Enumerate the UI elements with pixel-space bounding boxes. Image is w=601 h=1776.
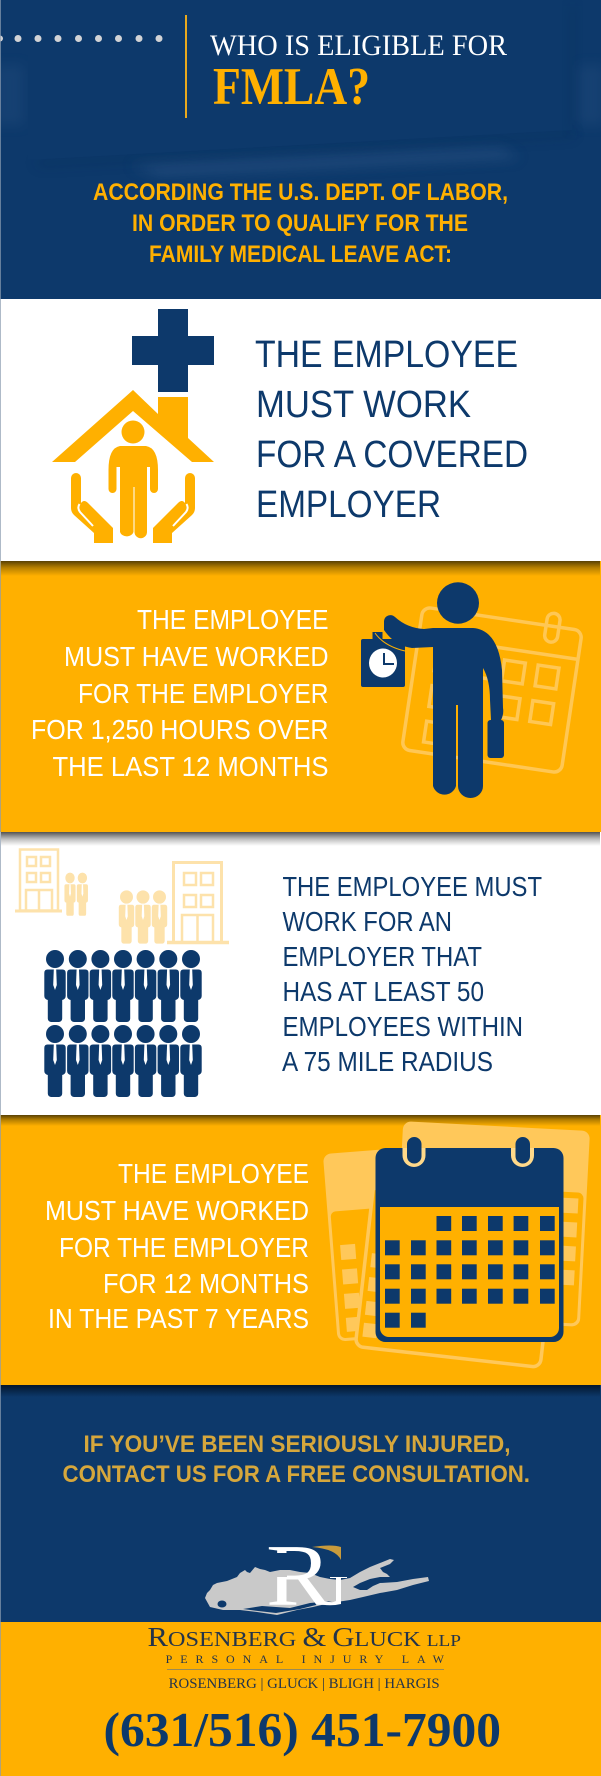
- panel text: FOR A COVERED: [256, 434, 528, 476]
- title: WHO IS ELIGIBLE FOR: [210, 29, 507, 62]
- intro text: [93, 179, 508, 268]
- panel text: EMPLOYEES WITHIN: [282, 1011, 523, 1042]
- panel text: MUST WORK: [256, 384, 471, 426]
- panel: covered employer: [0, 299, 601, 561]
- intro text: ACCORDING THE U.S. DEPT. OF LABOR,: [93, 179, 508, 206]
- panel text: EMPLOYER: [256, 484, 441, 526]
- intro text: FAMILY MEDICAL LEAVE ACT:: [149, 241, 452, 268]
- panel text: HAS AT LEAST 50: [282, 976, 484, 1007]
- panel text: FOR THE EMPLOYER: [78, 678, 328, 709]
- panel text: A 75 MILE RADIUS: [282, 1046, 493, 1077]
- panel: 1,250 hours: [0, 561, 601, 832]
- panel: footer gold: [0, 1622, 601, 1776]
- panel text: FOR 1,250 HOURS OVER: [31, 714, 328, 745]
- intro text: IN ORDER TO QUALIFY FOR THE: [132, 210, 468, 237]
- logo: Long Island map with RG mark: R: [266, 1528, 332, 1625]
- panel text: [255, 334, 528, 526]
- panel text: FOR THE EMPLOYER: [59, 1232, 309, 1263]
- title: [210, 29, 507, 116]
- icon: rows of employees: [44, 950, 202, 1097]
- panel text: FOR 12 MONTHS: [103, 1268, 309, 1299]
- icon: ghost buildings and people: [15, 850, 229, 944]
- phone number: (631/516) 451-7900: [104, 1702, 501, 1757]
- title: FMLA?: [213, 58, 370, 116]
- panel text: [31, 604, 328, 782]
- firm tagline: PERSONAL INJURY LAW: [166, 1652, 445, 1666]
- panel text: THE EMPLOYEE: [137, 604, 328, 635]
- panel: call to action navy: [0, 1385, 601, 1625]
- call to action text: [62, 1431, 530, 1488]
- logo: Long Island map with RG mark: [205, 1546, 429, 1615]
- attorney names: ROSENBERG | GLUCK | BLIGH | HARGIS: [169, 1676, 440, 1692]
- panel text: THE EMPLOYEE: [255, 334, 518, 376]
- panel text: WORK FOR AN: [282, 906, 452, 937]
- call to action text: CONTACT US FOR A FREE CONSULTATION.: [62, 1461, 530, 1488]
- icon: person with clock and briefcase: [361, 582, 504, 798]
- panel text: THE LAST 12 MONTHS: [52, 751, 328, 782]
- icon: navy calendar: [376, 1137, 564, 1342]
- panel text: MUST HAVE WORKED: [64, 641, 328, 672]
- panel text: EMPLOYER THAT: [282, 941, 482, 972]
- panel: 50 employees: [0, 832, 601, 1115]
- divider: [167, 1669, 444, 1670]
- call to action text: IF YOU’VE BEEN SERIOUSLY INJURED,: [84, 1431, 510, 1458]
- panel text: MUST HAVE WORKED: [45, 1195, 309, 1226]
- icon: ghost calendar: [402, 594, 584, 773]
- decorative dots row: [0, 35, 162, 42]
- panel text: THE EMPLOYEE: [118, 1158, 309, 1189]
- icon: ghost calendars: [323, 1121, 590, 1368]
- panel text: IN THE PAST 7 YEARS: [48, 1303, 309, 1334]
- firm name: ROSENBERG & GLUCK LLP: [148, 1622, 461, 1652]
- panel text: THE EMPLOYEE MUST: [282, 871, 542, 902]
- panel text: [45, 1158, 309, 1334]
- icon: medical house with person and hands: [52, 309, 214, 543]
- left edge line: [0, 0, 1, 1776]
- panel: 12 months: [0, 1115, 601, 1385]
- panel: header navy background: [0, 0, 601, 300]
- panel text: [282, 871, 542, 1077]
- title divider line: [185, 15, 187, 118]
